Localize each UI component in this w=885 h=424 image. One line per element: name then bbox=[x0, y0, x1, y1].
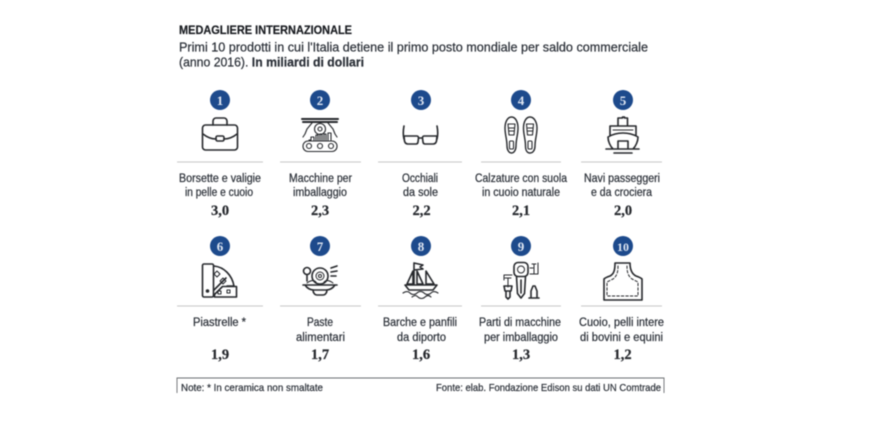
rank badge 5: 5 bbox=[620, 93, 627, 108]
label: e da crociera bbox=[591, 187, 653, 199]
icon: glasses bbox=[403, 126, 438, 144]
rank badge 2: 2 bbox=[317, 93, 323, 108]
value: 2,2 bbox=[412, 203, 431, 219]
label: Navi passeggeri bbox=[584, 173, 660, 185]
label: Piastrelle * bbox=[193, 317, 247, 329]
value: 1,2 bbox=[613, 347, 632, 363]
value: 1,7 bbox=[311, 347, 329, 363]
rank badge 8: 8 bbox=[418, 239, 425, 254]
value: 3,0 bbox=[211, 203, 229, 219]
source: Fonte: elab. Fondazione Edison su dati UN Comtrade bbox=[436, 382, 661, 394]
item 5: navi bbox=[581, 90, 662, 219]
label: imballaggio bbox=[293, 187, 347, 199]
rank badge 6: 6 bbox=[217, 239, 224, 254]
icon: sailboat bbox=[403, 263, 438, 298]
note: Note: * In ceramica non smaltate bbox=[181, 382, 323, 394]
value: 1,3 bbox=[512, 347, 530, 363]
header block bbox=[179, 23, 648, 70]
subtitle line 1: Primi 10 prodotti in cui l'Italia detiene il primo posto mondiale per saldo commerciale bbox=[179, 40, 648, 54]
rank badge 7: 7 bbox=[317, 239, 324, 254]
rank badge 4: 4 bbox=[518, 93, 525, 108]
item 6: piastrelle bbox=[177, 236, 263, 363]
item 7: paste bbox=[280, 236, 361, 363]
label bbox=[475, 173, 568, 199]
label: Calzature con suola bbox=[475, 173, 568, 185]
item 1: borsette bbox=[177, 90, 263, 219]
label: da diporto bbox=[397, 332, 446, 344]
item 9: parti bbox=[479, 236, 561, 363]
value: 1,9 bbox=[211, 347, 229, 363]
label: Macchine per bbox=[289, 173, 352, 185]
label bbox=[383, 317, 457, 344]
icon: shoes bbox=[505, 117, 537, 153]
label: Parti di macchine bbox=[479, 317, 561, 329]
icon: cruise ship bbox=[606, 117, 639, 153]
label: Cuoio, pelli intere bbox=[579, 317, 664, 329]
item 8: barche bbox=[378, 236, 462, 363]
icon: leather hide bbox=[604, 263, 642, 300]
label: in pelle e cuoio bbox=[185, 187, 253, 199]
label: Occhiali bbox=[402, 173, 438, 185]
rank badge 10: 10 bbox=[617, 240, 629, 254]
value: 2,0 bbox=[614, 203, 632, 219]
label: Barche e panfili bbox=[383, 317, 457, 329]
icon: tile samples bbox=[202, 264, 236, 297]
label bbox=[479, 317, 561, 344]
icon: pasta plate bbox=[303, 266, 337, 295]
item 3: occhiali bbox=[378, 90, 462, 219]
item 4: calzature bbox=[475, 90, 568, 219]
item 10: cuoio bbox=[579, 236, 664, 363]
label bbox=[179, 173, 261, 199]
label bbox=[584, 173, 660, 199]
icon: machine parts bbox=[504, 262, 539, 299]
value: 1,6 bbox=[412, 347, 430, 363]
label: da sole bbox=[403, 187, 438, 199]
label bbox=[402, 173, 438, 199]
label: Paste bbox=[307, 317, 333, 329]
label: Borsette e valigie bbox=[179, 173, 261, 185]
label: alimentari bbox=[296, 332, 345, 344]
icon: briefcase bbox=[202, 118, 238, 150]
footer notes box bbox=[177, 378, 664, 394]
title: MEDAGLIERE INTERNAZIONALE bbox=[179, 23, 352, 37]
label: di bovini e equini bbox=[580, 332, 663, 344]
label bbox=[289, 173, 352, 199]
label bbox=[579, 317, 664, 344]
value: 2,1 bbox=[512, 203, 530, 219]
subtitle line 2: (anno 2016). In miliardi di dollari bbox=[179, 56, 364, 70]
icon: packaging machine bbox=[302, 119, 338, 152]
rank badge 1: 1 bbox=[217, 93, 223, 108]
item 2: macchine bbox=[280, 90, 361, 219]
rank badge 9: 9 bbox=[518, 239, 525, 254]
label: per imballaggio bbox=[484, 332, 558, 344]
label bbox=[296, 317, 345, 344]
rank badge 3: 3 bbox=[418, 93, 425, 108]
value: 2,3 bbox=[311, 203, 329, 219]
label: in cuoio naturale bbox=[482, 187, 560, 199]
